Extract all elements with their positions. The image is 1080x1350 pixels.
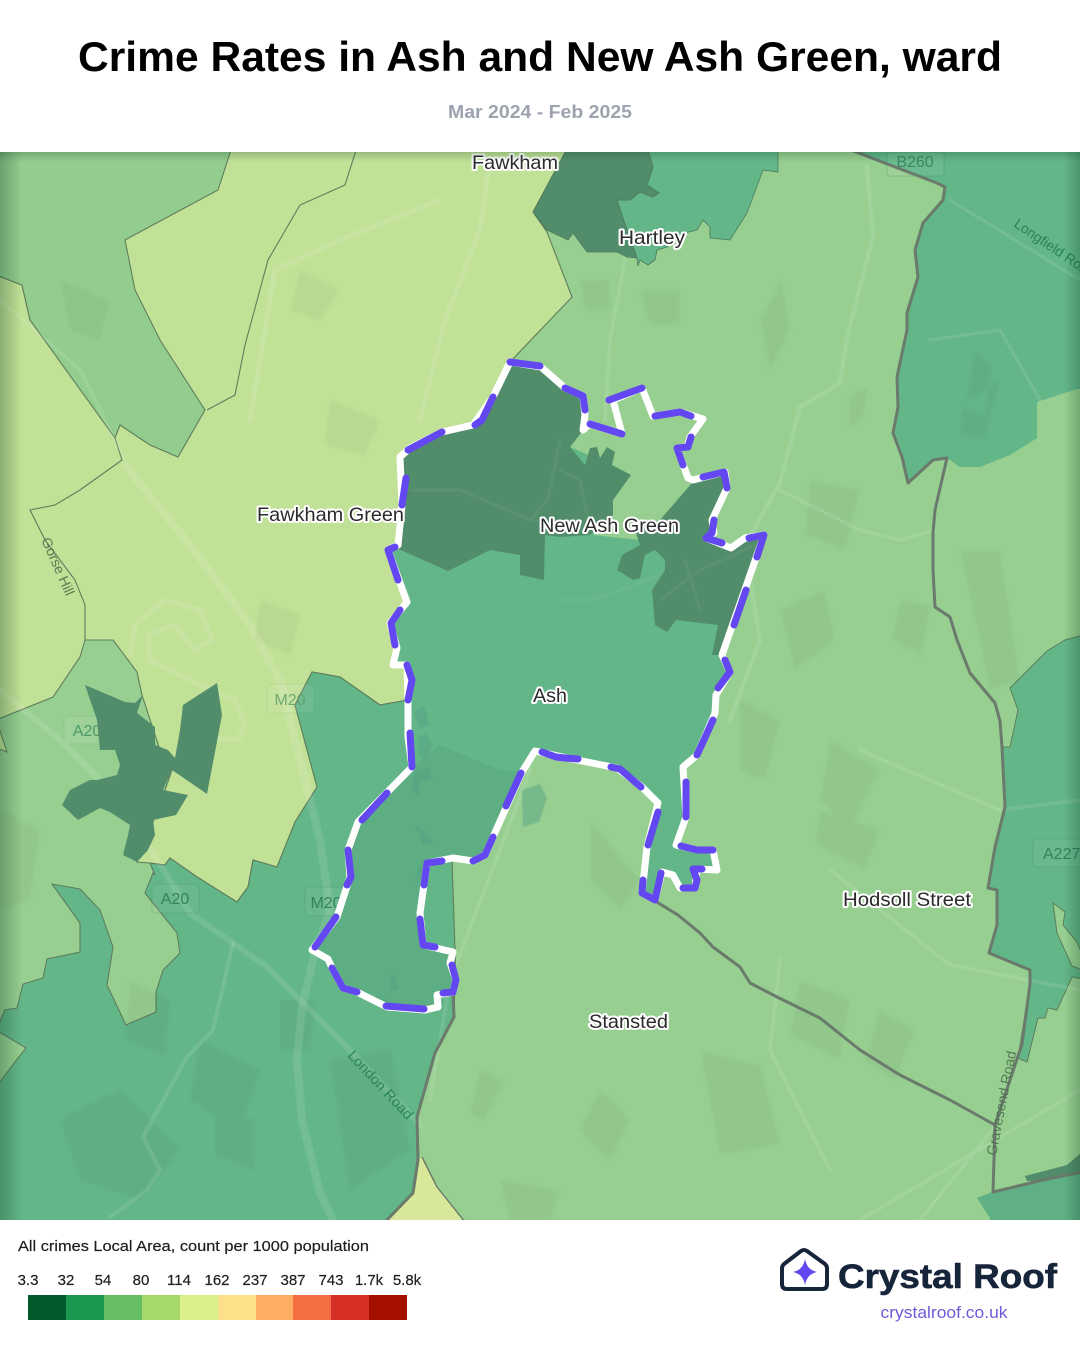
region: small yellow sliver at left edge (0, 730, 8, 753)
legend scale labels: 162 (204, 1272, 230, 1289)
region: Fawkham north dark (533, 147, 659, 258)
ward dark zone: north-west (396, 362, 631, 580)
road shield: B260 (887, 152, 944, 176)
road shield: M20 north (267, 684, 314, 713)
legend scale labels: 237 (242, 1272, 268, 1289)
region: south-east corner mid green (977, 1172, 1080, 1222)
place label: Fawkham: Fawkham (472, 152, 558, 174)
region: east mid green (988, 635, 1080, 1062)
ward boundary: purple dashes (315, 362, 764, 1009)
region: Hartley mid green (617, 147, 778, 266)
ward detail: streets inside dark zones (460, 441, 754, 609)
icon: house outline with star (782, 1250, 827, 1289)
area boundary lines (385, 150, 1080, 1222)
road shield: M20 south: M20 (310, 895, 342, 912)
ward boundary: white dashed base (312, 362, 764, 1010)
title: Crime Rates in Ash and New Ash Green, ward (78, 33, 1002, 80)
road shield: B260: B260 (896, 154, 934, 171)
panel: choropleth map (0, 147, 1080, 1225)
road shield: A227 (1033, 839, 1080, 867)
place label: Stansted: Stansted (589, 1011, 668, 1033)
region: bottom yellow sliver (389, 1157, 462, 1220)
region: east notch light (1053, 903, 1080, 970)
road label: Gravesend Road: Gravesend Road (983, 1049, 1019, 1157)
legend scale labels: 54 (95, 1272, 111, 1289)
legend scale labels: 3.3 (18, 1272, 38, 1289)
road shield: M20 south (304, 886, 343, 916)
legend scale labels: 743 (318, 1272, 344, 1289)
ward dark zone: east (617, 472, 764, 655)
road shield: A227: A227 (1043, 846, 1080, 863)
road label: Gorse Hill: Gorse Hill (38, 535, 78, 598)
legend scale labels: 80 (133, 1272, 149, 1289)
legend title: All crimes Local Area, count per 1000 population (18, 1238, 369, 1255)
place label: New Ash Green: New Ash Green (540, 515, 679, 537)
place label: Hodsoll Street: Hodsoll Street (843, 889, 972, 911)
legend scale labels: 114 (167, 1272, 191, 1289)
place label: Hartley: Hartley (619, 227, 685, 249)
website: crystalroof.co.uk (880, 1304, 1008, 1322)
region: south-west mid green (0, 672, 456, 1225)
wordmark: Crystal Roof (838, 1258, 1058, 1296)
ward detail: ponds (415, 707, 547, 827)
ward fill: north light area (570, 388, 703, 540)
legend scale labels: 1.7k (355, 1272, 384, 1289)
road shield: M20 north: M20 (274, 692, 306, 709)
ward fill: darker south-west limb (417, 746, 438, 764)
map base area: low crime light green (0, 152, 1080, 1220)
legend scale labels: 32 (58, 1272, 74, 1289)
boundary lines inside the yellow band (30, 147, 357, 640)
region: south-east corner dark (1025, 1152, 1080, 1181)
road shield: A20 north: A20 (73, 723, 101, 740)
region: yellow-green higher band, west of ward (0, 147, 572, 902)
place label: Fawkham Green: Fawkham Green (257, 504, 404, 526)
region: top-left green (0, 147, 232, 457)
region: north-east mid green (851, 150, 1080, 483)
legend scale labels: 387 (280, 1272, 306, 1289)
legend scale labels (18, 1272, 422, 1289)
logo: Crystal Roof (782, 1250, 1058, 1322)
place label: Ash: Ash (533, 685, 567, 707)
road shield: A20 north (64, 716, 100, 744)
ward fill: Ash mid green (392, 433, 748, 894)
road network (0, 160, 1080, 1220)
legend scale labels: 5.8k (393, 1272, 422, 1289)
dark cluster: West Kingsdown (62, 683, 222, 862)
legend (18, 1238, 422, 1320)
legend colour ramp (28, 1295, 407, 1320)
road shield: A20 south: A20 (161, 891, 189, 908)
road shield: A20 south (152, 884, 199, 913)
road label: London Road: London Road (345, 1047, 417, 1122)
subtitle: date range: Mar 2024 - Feb 2025 (448, 102, 632, 122)
terrain patches (258, 274, 376, 651)
